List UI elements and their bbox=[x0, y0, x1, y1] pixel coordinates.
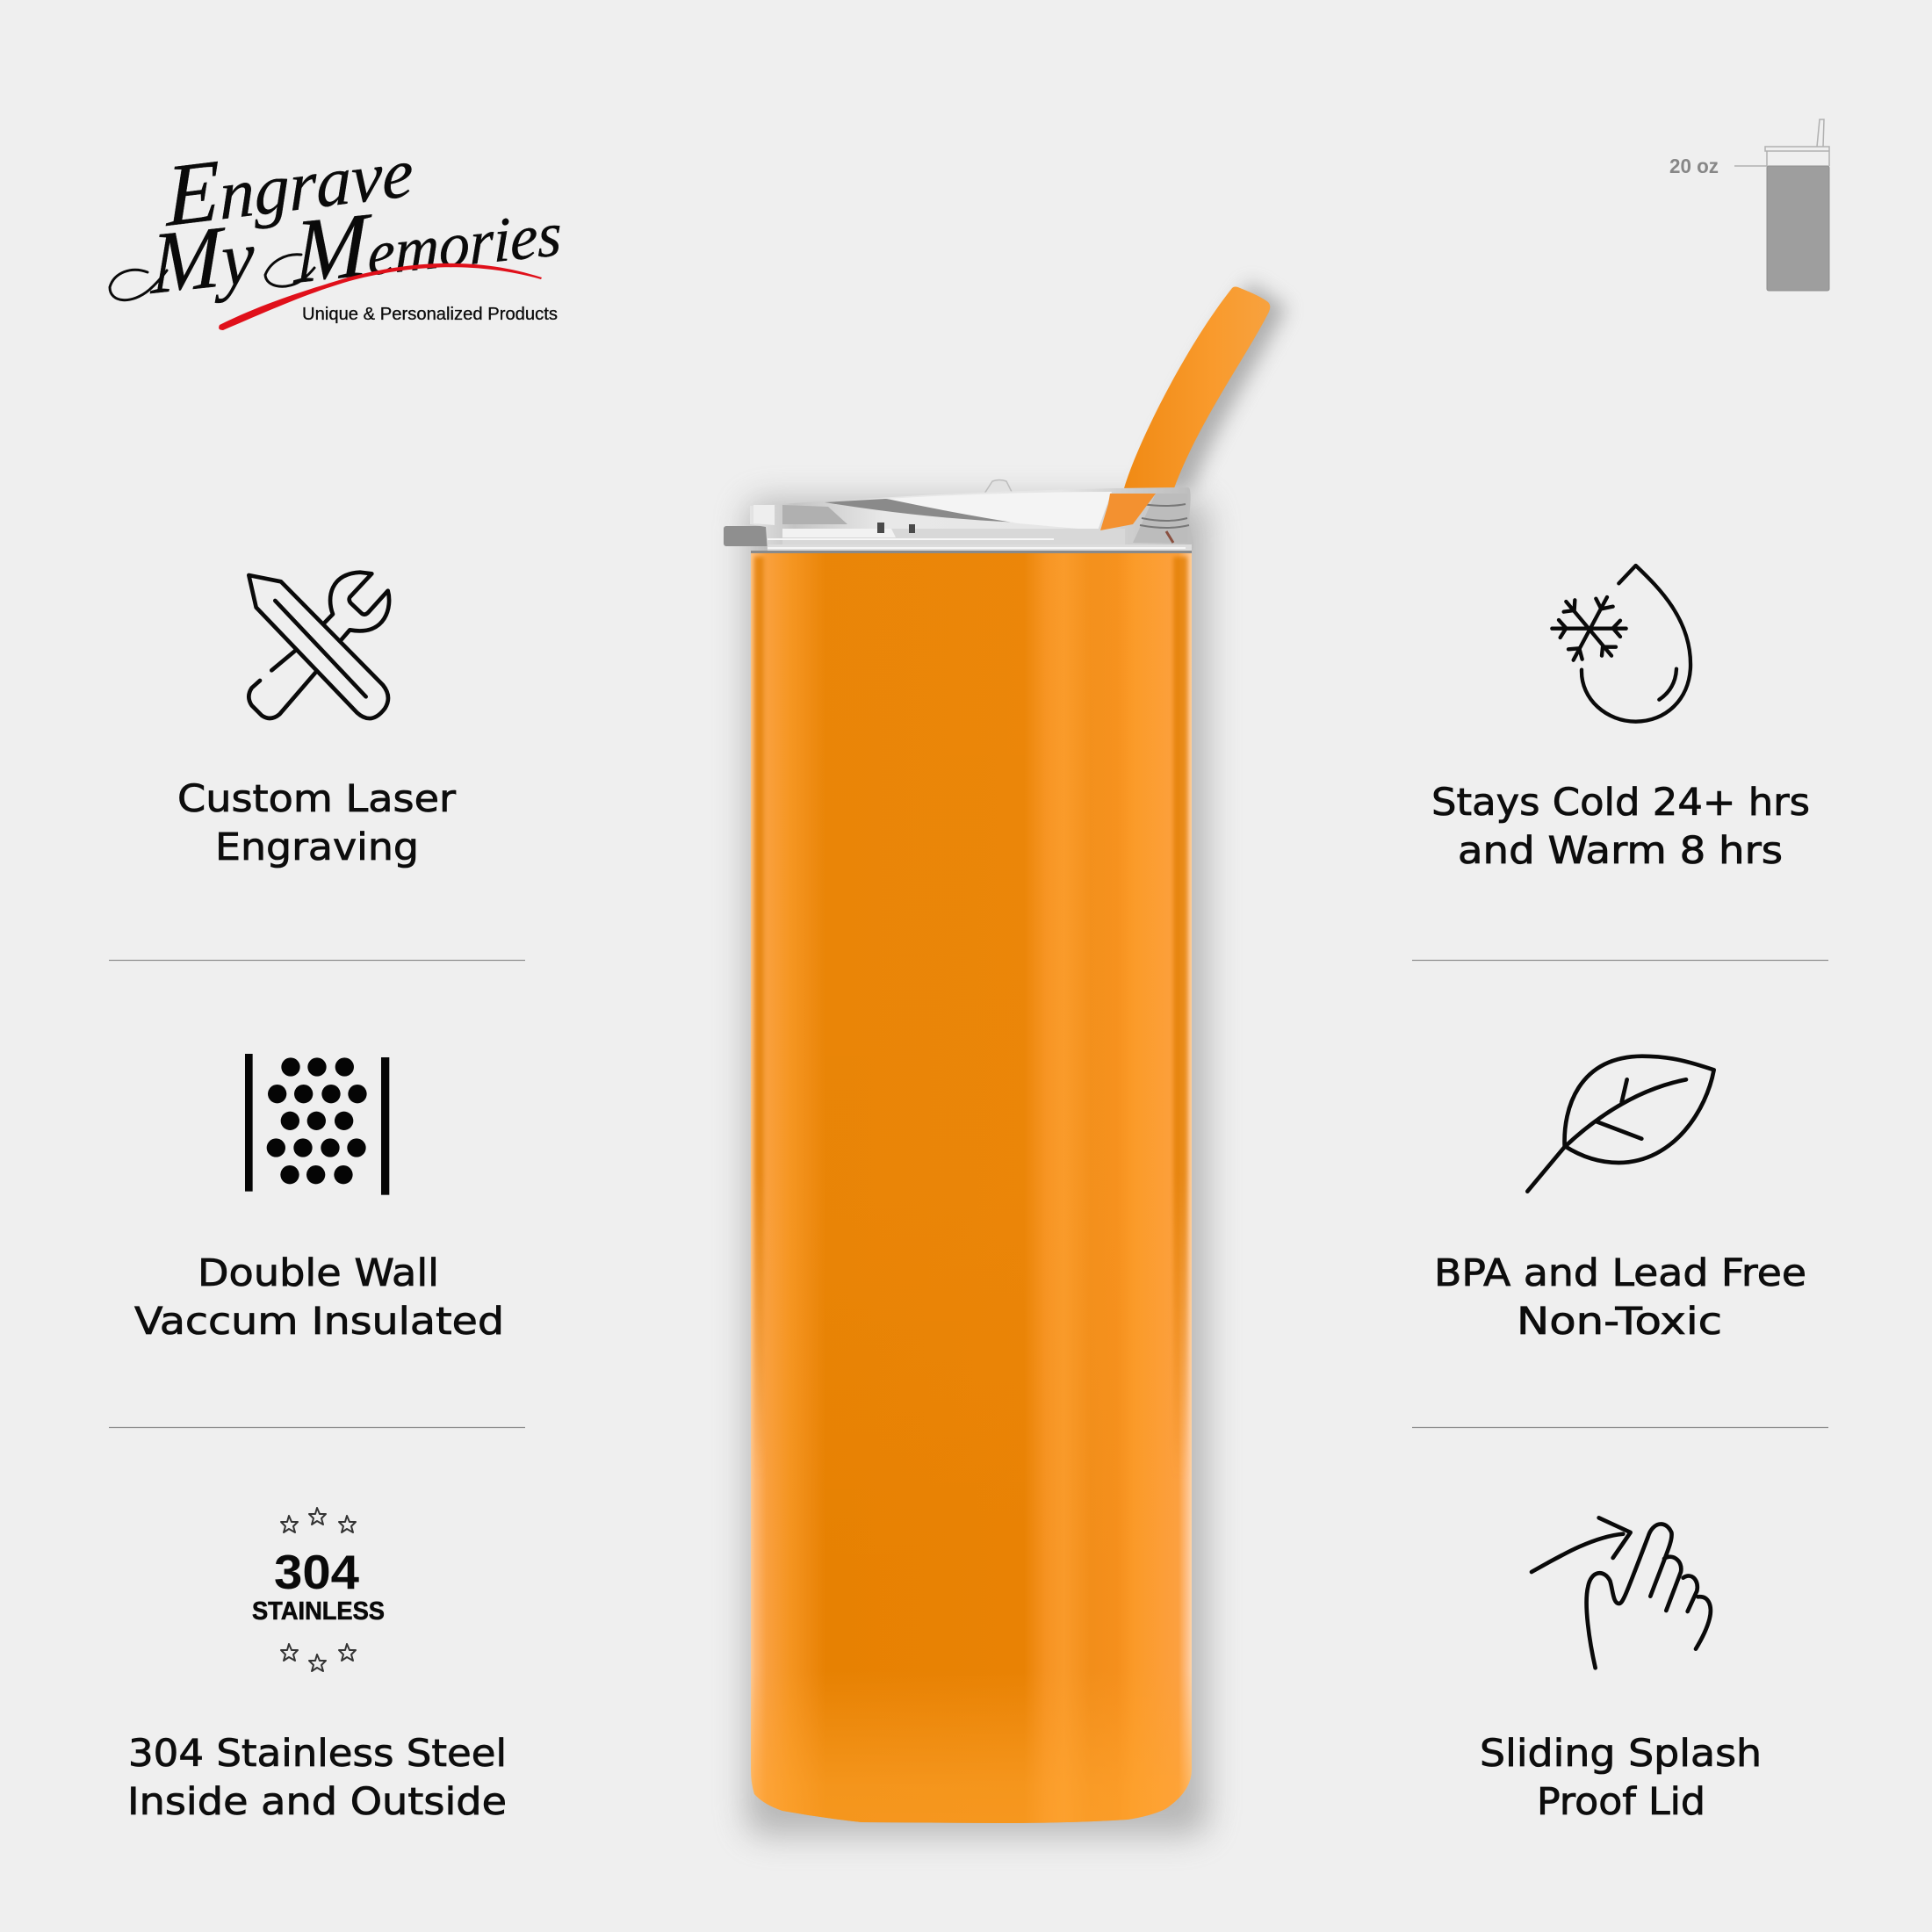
icon: hand swipe with arrow bbox=[1532, 1517, 1711, 1668]
mini tumbler fill bbox=[1767, 166, 1829, 291]
straw bbox=[1124, 286, 1270, 488]
label bbox=[177, 777, 456, 869]
label: and Warm 8 hrs bbox=[1458, 829, 1783, 873]
logo word: Memories: Memories bbox=[292, 173, 561, 303]
logo flourishes bbox=[110, 255, 314, 300]
size indicator: 20 oz bbox=[1669, 119, 1829, 291]
lid reflections bbox=[753, 492, 1192, 551]
logo word: My: My bbox=[149, 204, 255, 313]
icon: pencil and wrench bbox=[249, 573, 389, 718]
feature: BPA and lead free bbox=[1434, 1056, 1806, 1344]
size label: 20 oz bbox=[1669, 155, 1719, 177]
label bbox=[134, 1251, 504, 1344]
label: Stays Cold 24+ hrs bbox=[1431, 781, 1810, 825]
icon: water drop with snowflake bbox=[1552, 566, 1690, 722]
lid lower edge bbox=[751, 551, 1192, 553]
label: BPA and Lead Free bbox=[1434, 1251, 1806, 1295]
label: Inside and Outside bbox=[127, 1780, 507, 1824]
label: 304 Stainless Steel bbox=[128, 1732, 507, 1776]
icon: 304 stainless badge: STAINLESS bbox=[252, 1597, 385, 1626]
label: Sliding Splash bbox=[1480, 1732, 1762, 1776]
lid side tab bbox=[724, 526, 769, 546]
tumbler product photo bbox=[724, 283, 1287, 1835]
label: Proof Lid bbox=[1537, 1780, 1705, 1824]
lid bbox=[724, 479, 1193, 553]
logo red swoosh bbox=[219, 263, 542, 330]
lid main shell bbox=[750, 487, 1193, 551]
feature: double wall vacuum insulated bbox=[134, 1054, 504, 1344]
icon: double wall with dots bbox=[245, 1054, 389, 1195]
label bbox=[127, 1732, 507, 1824]
label bbox=[1431, 781, 1810, 873]
label: Custom Laser bbox=[177, 777, 456, 821]
label: Vaccum Insulated bbox=[134, 1300, 504, 1344]
feature: custom laser engraving bbox=[177, 573, 456, 869]
logo word: Engrave: Engrave bbox=[163, 117, 414, 245]
mini tumbler outline bbox=[1765, 119, 1829, 166]
stars bbox=[281, 1508, 356, 1671]
feature: 304 stainless steel bbox=[127, 1508, 507, 1824]
brand logo bbox=[110, 117, 561, 330]
icon: 304 stainless badge bbox=[252, 1508, 385, 1671]
lid knob bbox=[984, 479, 1013, 494]
label: Double Wall bbox=[198, 1251, 439, 1295]
feature: stays cold and warm bbox=[1431, 566, 1810, 873]
tumbler side bands bbox=[754, 557, 1187, 1786]
size pointer line bbox=[1734, 165, 1767, 167]
icon: leaf bbox=[1527, 1056, 1714, 1192]
tumbler shadow bbox=[746, 283, 1287, 1835]
label: Non-Toxic bbox=[1517, 1300, 1722, 1344]
orange straw seen through lid bbox=[1100, 494, 1156, 530]
tumbler body bbox=[751, 553, 1192, 1823]
label bbox=[1480, 1732, 1762, 1824]
label: Engraving bbox=[215, 825, 419, 869]
feature: sliding splash proof lid bbox=[1480, 1517, 1762, 1824]
icon: 304 stainless badge: 304 bbox=[274, 1545, 359, 1599]
label bbox=[1434, 1251, 1806, 1344]
logo tagline: Unique & Personalized Products bbox=[302, 304, 558, 324]
